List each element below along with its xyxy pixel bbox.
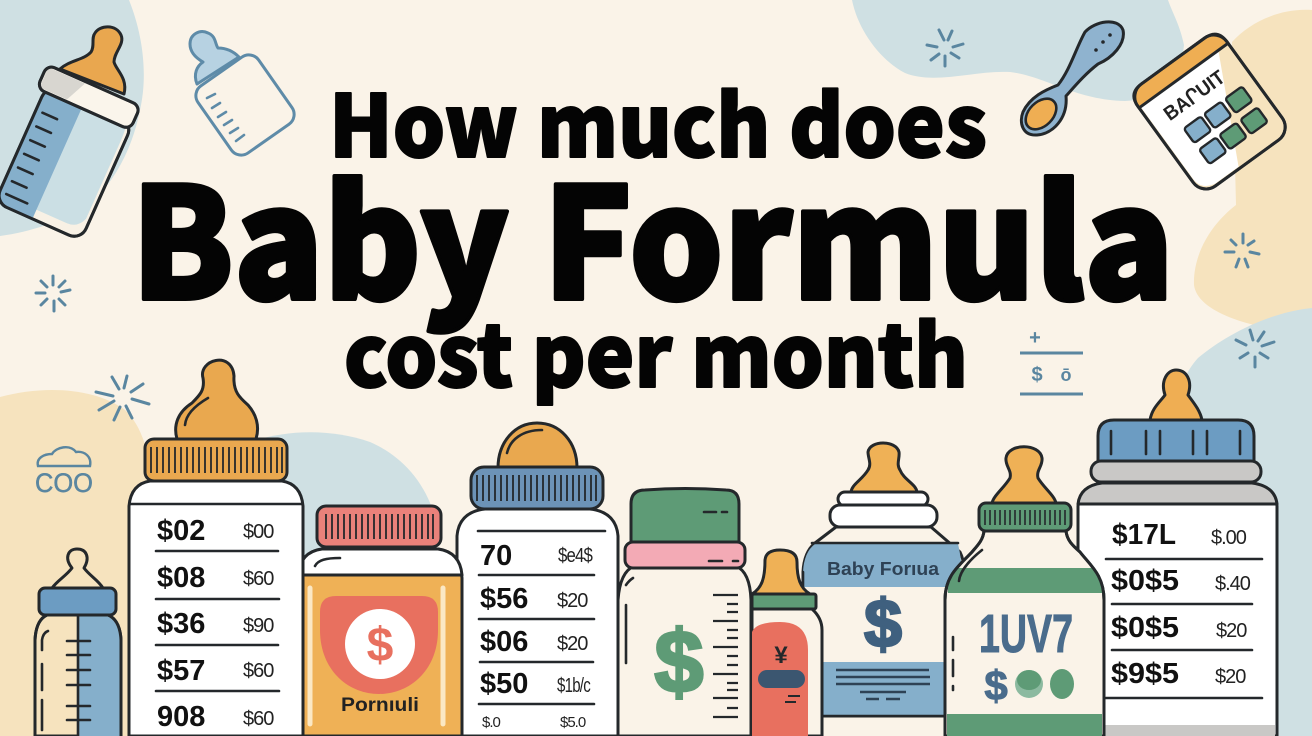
background blob: bottom left yellow: [0, 390, 155, 736]
bottle 9: large price bottle right: $17L: [1112, 519, 1176, 551]
bottle 2: tall price bottle: $60: [243, 708, 274, 730]
label text: Baby Forıua: [827, 559, 940, 579]
bottle 4: dome cap price bottle: $20: [557, 590, 588, 612]
bottle 9: large price bottle right: $20: [1216, 620, 1247, 642]
bottle 9: large price bottle right: $20: [1215, 666, 1246, 688]
bottle 2: tall price bottle: $57: [157, 655, 205, 687]
jar 3: orange formula jar: $: [367, 619, 394, 672]
bottle 9: large price bottle right: $.00: [1211, 527, 1247, 549]
bottle 4: dome cap price bottle: $5.0: [560, 714, 586, 731]
bottle 9: large price bottle right: $9$5: [1111, 658, 1179, 690]
bottle 4: dome cap price bottle: $20: [557, 633, 588, 655]
title line 3: cost per month: [344, 287, 968, 412]
bottle 5: green cap bottle with dollar: [618, 488, 751, 736]
bottle 2: tall price bottle: $60: [243, 660, 274, 682]
title: [131, 57, 1174, 412]
bottle 4: dome cap price bottle: $06: [480, 626, 528, 658]
background blob: top left blue: [0, 0, 144, 236]
background blob: bottom centre blue: [250, 432, 436, 560]
bottle 2: tall price bottle: $02: [157, 515, 205, 547]
bottle 9: large price bottle right: $0$5: [1111, 612, 1179, 644]
sparkle: [927, 30, 963, 66]
label text on box: BAՐUIT: [1160, 66, 1229, 125]
bottle 7: Baby Formula labelled bottle: [803, 443, 964, 736]
bottle 7: Baby Formula labelled bottle: $: [864, 586, 902, 662]
bottle 2: tall price bottle: [129, 360, 303, 736]
icon: spoon: [1020, 22, 1123, 135]
sparkle: [36, 276, 70, 311]
bottle 1: small half-blue bottle: [35, 549, 121, 736]
small formula icon: ō: [1060, 365, 1072, 385]
icon: formula calendar box: [1128, 29, 1292, 195]
bottle 4: dome cap price bottle: $.0: [482, 714, 501, 731]
cloud COO icon: COO: [35, 468, 93, 498]
bottle 4: dome cap price bottle: 70: [480, 540, 512, 572]
bottle 4: dome cap price bottle: $e4$: [558, 545, 593, 567]
bottle 2: tall price bottle: $90: [243, 615, 274, 637]
bottle 8: green label bottle: [945, 447, 1104, 736]
icon: outlined baby bottle: [190, 32, 299, 160]
bottle 5: green cap bottle with dollar: $: [655, 612, 703, 711]
small formula icon: +: [1029, 327, 1041, 349]
sparkle: [96, 376, 149, 420]
cloud COO icon: [35, 447, 93, 498]
title line 1: How much does: [329, 57, 987, 182]
bottle 8: green label bottle: 1UV7: [979, 604, 1073, 664]
bottle 4: dome cap price bottle: $1b/c: [557, 675, 591, 697]
bottle 9: large price bottle right: $0$5: [1111, 565, 1179, 597]
sparkle: [1236, 330, 1274, 367]
small formula icon: $: [1031, 364, 1043, 386]
background blob: bottom right blue: [1177, 308, 1312, 736]
jar 3: orange formula jar: [298, 506, 462, 736]
sparkle: [1225, 234, 1259, 267]
bottle 6: small red label bottle: ¥: [774, 642, 788, 669]
bottle 2: tall price bottle: $08: [157, 562, 205, 594]
icon: tilted baby bottle top left: [0, 27, 141, 240]
bottle 9: large price bottle right: [1078, 370, 1277, 736]
jar label: Pornıuli: [341, 695, 419, 716]
background blob: top right blue: [852, 0, 1184, 101]
bottle 9: large price bottle right: $.40: [1215, 573, 1251, 595]
bottle 4: dome cap price bottle: $56: [480, 583, 528, 615]
bottle 8: green label bottle: $: [984, 662, 1008, 709]
bottle 2: tall price bottle: $36: [157, 608, 205, 640]
bottle 2: tall price bottle: $60: [243, 568, 274, 590]
bottle 4: dome cap price bottle: [457, 423, 618, 736]
bottle 4: dome cap price bottle: $50: [480, 668, 528, 700]
small formula icon: [1020, 327, 1083, 394]
bottle 6: small red label bottle: [752, 550, 822, 736]
background blob: right yellow: [1194, 10, 1312, 334]
bottle 2: tall price bottle: 908: [157, 701, 205, 733]
bottle 2: tall price bottle: $00: [243, 521, 274, 543]
title line 2: Baby Formula: [131, 121, 1174, 344]
